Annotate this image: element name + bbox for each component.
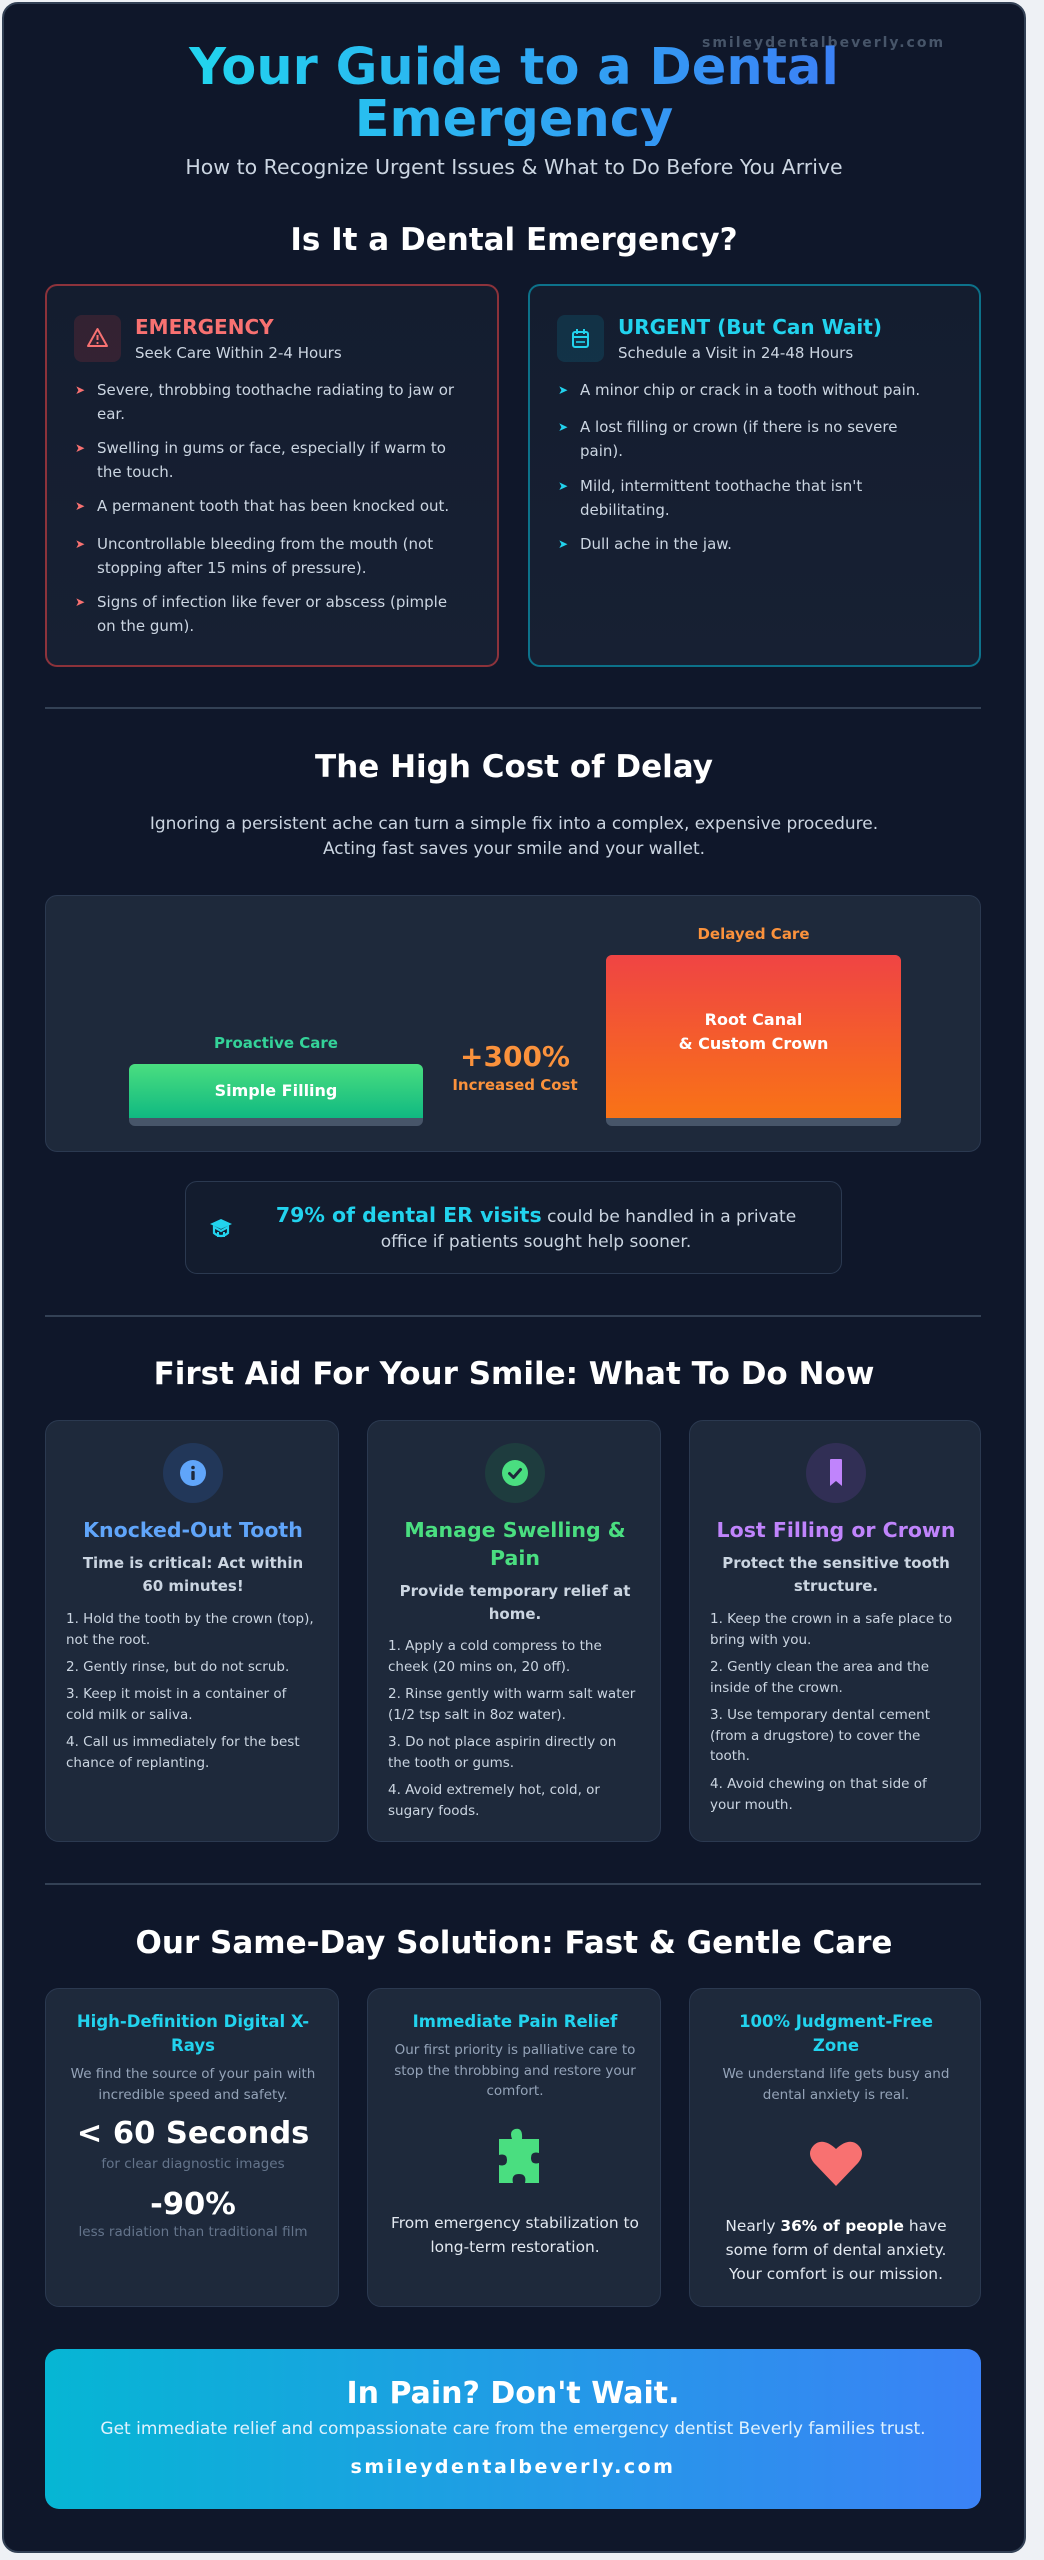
- stat: -90%: -90%: [150, 2187, 236, 2222]
- panel: lost filling: (from a drugstore) to cover the: [710, 1728, 920, 1744]
- emergency list: on the gum).: [97, 617, 194, 635]
- panel: lost filling: Lost Filling or Crown: [717, 1518, 955, 1542]
- panel: pain relief: stop the throbbing and restore your: [394, 2062, 636, 2078]
- icon: check: [485, 1443, 545, 1503]
- stat text: [276, 1203, 796, 1252]
- icon: info: [163, 1443, 223, 1503]
- panel: urgent: [528, 284, 981, 667]
- panel: emergency: ➤: [75, 499, 85, 513]
- emergency list: A permanent tooth that has been knocked out.: [97, 497, 449, 515]
- panel: swelling: 3. Do not place aspirin directly on: [388, 1734, 616, 1750]
- heading: is it an emergency: Is It a Dental Emergency?: [290, 222, 738, 258]
- panel: urgent: ➤: [558, 383, 568, 397]
- panel: knocked-out tooth: not the root.: [66, 1632, 150, 1648]
- panel: urgent: ➤: [558, 479, 568, 493]
- panel: knocked-out tooth: [45, 1420, 339, 1842]
- panel: pain relief: comfort.: [486, 2083, 543, 2099]
- panel: lost filling: inside of the crown.: [710, 1680, 843, 1696]
- panel: swelling: [367, 1420, 661, 1842]
- panel: swelling: home.: [489, 1605, 541, 1623]
- panel: judgment-free: Zone: [813, 2036, 859, 2055]
- heading: same-day solution: Our Same-Day Solution: Fast & Gentle Care: [136, 1925, 892, 1961]
- panel: judgment-free: 100% Judgment-Free: [739, 2012, 933, 2031]
- panel: swelling: (1/2 tsp salt in 8oz water).: [388, 1706, 566, 1722]
- watermark: smileydentalbeverly.com: [702, 35, 945, 51]
- panel: lost filling: 3. Use temporary dental cement: [710, 1707, 930, 1723]
- panel: swelling: Provide temporary relief at: [400, 1582, 630, 1600]
- stat text: 79% of dental ER visits could be handled in a private: [276, 1203, 796, 1227]
- icon: warning: [74, 315, 121, 362]
- panel: x-rays: less radiation than traditional film: [79, 2224, 307, 2240]
- panel: judgment-free: some form of dental anxiety.: [726, 2241, 946, 2259]
- panel: x-rays: for clear diagnostic images: [101, 2156, 285, 2172]
- icon: heart: [810, 2142, 862, 2186]
- panel: swelling: Pain: [490, 1546, 540, 1570]
- panel: emergency: ➤: [75, 537, 85, 551]
- panel: pain relief: Immediate Pain Relief: [413, 2012, 617, 2031]
- panel: pain relief: [367, 1988, 661, 2307]
- bar chart panel: [45, 895, 981, 1152]
- emergency list: Swelling in gums or face, especially if warm to: [97, 439, 446, 457]
- delayed bar: Delayed Care: [697, 925, 810, 943]
- urgent list: pain).: [580, 442, 623, 460]
- emergency list: the touch.: [97, 463, 173, 481]
- panel: knocked-out tooth: chance of replanting.: [66, 1754, 209, 1770]
- panel: swelling: the tooth or gums.: [388, 1754, 514, 1770]
- panel: lost filling: structure.: [794, 1577, 878, 1595]
- panel: lost filling: your mouth.: [710, 1796, 793, 1812]
- panel: knocked-out tooth: 60 minutes!: [142, 1577, 244, 1595]
- panel: x-rays: incredible speed and safety.: [98, 2086, 288, 2102]
- panel: x-rays: We find the source of your pain with: [71, 2066, 315, 2082]
- stat text: office if patients sought help sooner.: [381, 1232, 691, 1252]
- emergency list: [75, 381, 454, 635]
- urgent title: URGENT (But Can Wait): [618, 315, 882, 339]
- emergency list: Signs of infection like fever or abscess (pimple: [97, 593, 447, 611]
- panel: swelling: 2. Rinse gently with warm salt water: [388, 1686, 635, 1702]
- panel: knocked-out tooth: Knocked-Out Tooth: [83, 1518, 303, 1542]
- title: Your Guide to a Dental: [189, 38, 839, 97]
- proactive bar: Simple Filling: [215, 1081, 337, 1100]
- CTA banner: In Pain? Don't Wait.: [346, 2376, 680, 2411]
- urgent list: A lost filling or crown (if there is no severe: [580, 418, 897, 436]
- cost paragraph: [150, 814, 878, 859]
- emergency list: stopping after 15 mins of pressure).: [97, 559, 366, 577]
- panel: lost filling: 1. Keep the crown in a safe place to: [710, 1611, 952, 1627]
- increase label: Increased Cost: [452, 1076, 578, 1094]
- emergency list: ear.: [97, 405, 125, 423]
- panel: lost filling: [689, 1420, 981, 1842]
- panel: x-rays: [45, 1988, 339, 2307]
- icon: calendar: [557, 315, 604, 362]
- panel: lost filling: Protect the sensitive tooth: [722, 1554, 950, 1572]
- increase label: +300%: [460, 1040, 570, 1073]
- title: [0, 42, 1028, 146]
- panel: knocked-out tooth: 4. Call us immediately for the best: [66, 1734, 300, 1750]
- panel: emergency: ➤: [75, 383, 85, 397]
- panel: pain relief: From emergency stabilization to: [391, 2214, 639, 2232]
- urgent list: Mild, intermittent toothache that isn't: [580, 477, 862, 495]
- icon: puzzle: [499, 2128, 539, 2183]
- heading: cost of delay: The High Cost of Delay: [315, 749, 713, 785]
- urgent list: [558, 381, 920, 553]
- panel: knocked-out tooth: 1. Hold the tooth by the crown (top),: [66, 1611, 314, 1627]
- panel: judgment-free: Nearly 36% of people have: [725, 2217, 947, 2235]
- panel: lost filling: bring with you.: [710, 1632, 811, 1648]
- panel: emergency: ➤: [75, 595, 85, 609]
- panel: pain relief: long-term restoration.: [430, 2238, 600, 2256]
- panel: judgment-free: dental anxiety is real.: [763, 2086, 909, 2102]
- panel: urgent: Schedule a Visit in 24-48 Hours: [618, 344, 853, 362]
- stat callout: [185, 1181, 842, 1274]
- cost paragraph: Acting fast saves your smile and your wallet.: [323, 839, 705, 859]
- panel: knocked-out tooth: 3. Keep it moist in a container of: [66, 1686, 286, 1702]
- panel: x-rays: High-Definition Digital X-: [77, 2012, 309, 2031]
- increase label: [452, 1040, 578, 1094]
- panel: pain relief: Our first priority is palliative care to: [395, 2042, 635, 2058]
- panel: swelling: sugary foods.: [388, 1802, 479, 1818]
- panel: urgent: ➤: [558, 537, 568, 551]
- panel: knocked-out tooth: 2. Gently rinse, but do not scrub.: [66, 1659, 289, 1675]
- panel: knocked-out tooth: cold milk or saliva.: [66, 1706, 193, 1722]
- proactive bar: [129, 1034, 423, 1126]
- CTA banner: Get immediate relief and compassionate care from the emergency dentist Beverly families trust.: [100, 2419, 926, 2439]
- urgent list: debilitating.: [580, 501, 670, 519]
- emergency list: Severe, throbbing toothache radiating to jaw or: [97, 381, 454, 399]
- CTA banner: [45, 2349, 981, 2509]
- emergency title: EMERGENCY: [135, 315, 274, 339]
- panel: swelling: 4. Avoid extremely hot, cold, or: [388, 1782, 600, 1798]
- panel: urgent: ➤: [558, 420, 568, 434]
- panel: swelling: Manage Swelling &: [404, 1518, 626, 1542]
- panel: lost filling: 4. Avoid chewing on that side of: [710, 1776, 927, 1792]
- CTA banner: smileydentalbeverly.com: [351, 2456, 675, 2478]
- panel: emergency: ➤: [75, 441, 85, 455]
- panel: swelling: 1. Apply a cold compress to the: [388, 1638, 602, 1654]
- stat: 60 seconds: < 60 Seconds: [77, 2116, 309, 2151]
- heading: first aid: First Aid For Your Smile: What To Do Now: [154, 1356, 874, 1392]
- urgent list: Dull ache in the jaw.: [580, 535, 732, 553]
- panel: judgment-free: We understand life gets busy and: [723, 2066, 949, 2082]
- panel: lost filling: tooth.: [710, 1748, 750, 1764]
- panel: emergency: [45, 284, 499, 667]
- proactive bar: Proactive Care: [214, 1034, 338, 1052]
- panel: emergency: Seek Care Within 2-4 Hours: [135, 344, 342, 362]
- cost paragraph: Ignoring a persistent ache can turn a simple fix into a complex, expensive procedure.: [150, 814, 878, 834]
- urgent list: A minor chip or crack in a tooth without pain.: [580, 381, 920, 399]
- icon: bookmark: [806, 1443, 866, 1503]
- panel: x-rays: Rays: [171, 2036, 215, 2055]
- panel: knocked-out tooth: Time is critical: Act within: [83, 1554, 303, 1572]
- panel: swelling: cheek (20 mins on, 20 off).: [388, 1658, 570, 1674]
- delayed bar: [606, 925, 901, 1126]
- emergency list: Uncontrollable bleeding from the mouth (not: [97, 535, 433, 553]
- icon: graduation cap: [210, 1219, 232, 1238]
- panel: judgment-free: Your comfort is our mission.: [729, 2265, 943, 2283]
- subtitle: How to Recognize Urgent Issues & What to Do Before You Arrive: [185, 155, 843, 179]
- title: Emergency: [355, 90, 673, 149]
- delayed bar: Root Canal: [705, 1010, 802, 1029]
- panel: judgment-free: [689, 1988, 981, 2307]
- delayed bar: & Custom Crown: [679, 1034, 828, 1053]
- panel: lost filling: 2. Gently clean the area and the: [710, 1659, 929, 1675]
